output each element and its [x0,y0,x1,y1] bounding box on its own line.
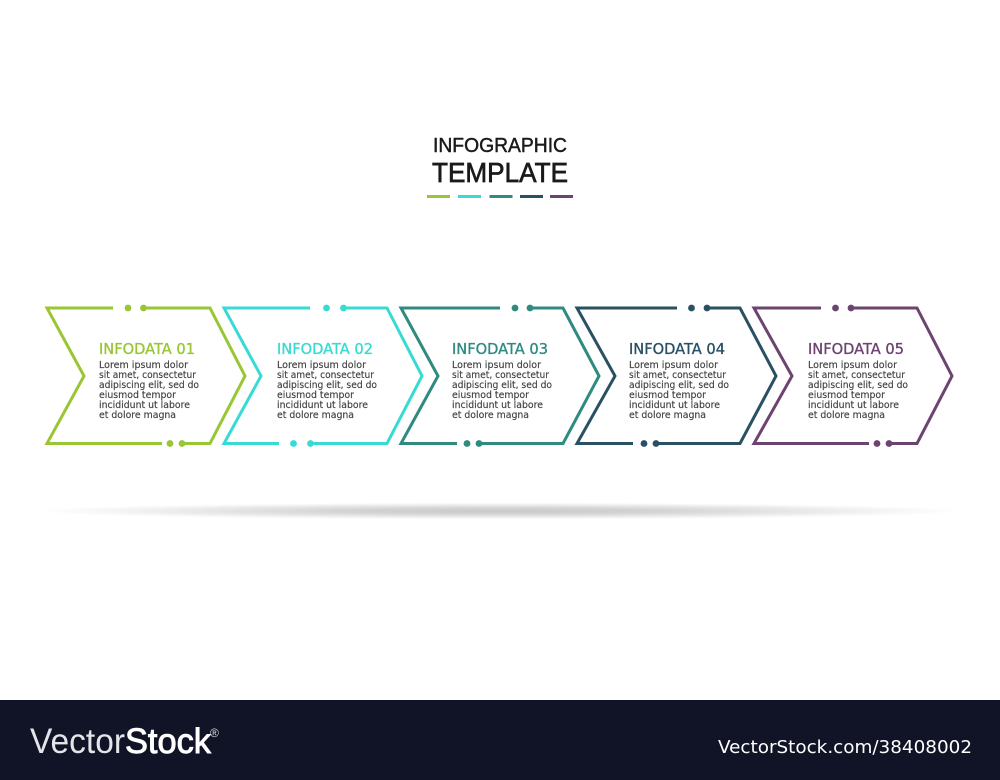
panel: infodata 02 [224,305,422,447]
text block 03: et dolore magna [452,410,529,421]
text block 03: eiusmod tempor [452,390,529,401]
heading 02: INFODATA 02 [277,340,373,358]
panel: infodata 01 [47,305,245,447]
chevron outline 04 [577,305,776,447]
heading 05: INFODATA 05 [808,340,904,358]
heading 04: INFODATA 04 [629,340,725,358]
text block 01: incididunt ut labore [99,400,190,411]
chevron outline 03 [401,305,599,447]
text block 03 [452,360,552,421]
footer bar [0,700,1000,780]
VectorStock logo [30,722,219,761]
text block 04: Lorem ipsum dolor [629,360,718,371]
text block 05: sit amet, consectetur [808,370,905,381]
text block 01: adipiscing elit, sed do [99,380,199,391]
text block 04 [629,360,729,421]
VectorStock logo: ® [210,726,219,740]
title: INFOGRAPHIC [433,134,567,157]
text block 04: et dolore magna [629,410,706,421]
text block 02: sit amet, consectetur [277,370,374,381]
VectorStock logo: Vector [30,722,125,761]
panel: infodata 04 [577,305,776,447]
text block 02 [277,360,377,421]
text block 01: et dolore magna [99,410,176,421]
title colour dashes [427,195,573,198]
title [432,134,568,188]
text block 01: eiusmod tempor [99,390,176,401]
chevron outline 01 [47,305,245,447]
text block 05: Lorem ipsum dolor [808,360,897,371]
title: TEMPLATE [432,157,568,188]
text block 04: eiusmod tempor [629,390,706,401]
text block 02: incididunt ut labore [277,400,368,411]
text block 03: incididunt ut labore [452,400,543,411]
text block 02: Lorem ipsum dolor [277,360,366,371]
text block 01: Lorem ipsum dolor [99,360,188,371]
chevron outline 05 [754,305,952,447]
text block 04: incididunt ut labore [629,400,720,411]
text block 03: sit amet, consectetur [452,370,549,381]
text block 01 [99,360,199,421]
chevron outline 02 [224,305,422,447]
text block 05: et dolore magna [808,410,885,421]
ground shadow [35,502,965,520]
panel: infodata 03 [401,305,599,447]
VectorStock logo: Stock [125,722,211,761]
text block 02: eiusmod tempor [277,390,354,401]
panel: infodata 05 [754,305,952,447]
text block 05 [808,360,908,421]
text block 05: adipiscing elit, sed do [808,380,908,391]
text block 02: adipiscing elit, sed do [277,380,377,391]
heading 03: INFODATA 03 [452,340,548,358]
text block 03: adipiscing elit, sed do [452,380,552,391]
text block 03: Lorem ipsum dolor [452,360,541,371]
text block 01: sit amet, consectetur [99,370,196,381]
image id: VectorStock.com/38408002 [718,738,972,758]
text block 05: incididunt ut labore [808,400,899,411]
heading 01: INFODATA 01 [99,340,195,358]
text block 04: adipiscing elit, sed do [629,380,729,391]
text block 02: et dolore magna [277,410,354,421]
text block 05: eiusmod tempor [808,390,885,401]
text block 04: sit amet, consectetur [629,370,726,381]
